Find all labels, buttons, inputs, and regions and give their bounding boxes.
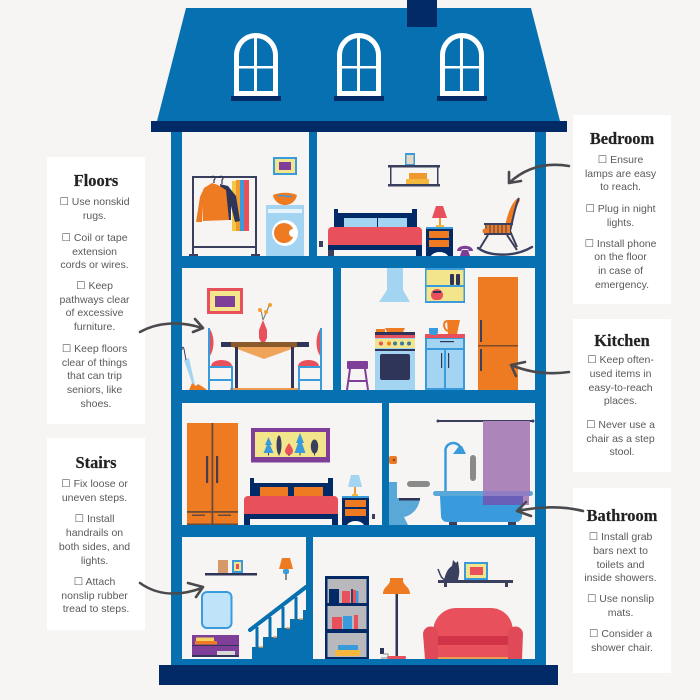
panel: bedroom [573, 115, 671, 304]
checklist: floors: furniture. [74, 321, 115, 333]
panel: kitchen [573, 319, 671, 472]
rocking chair [478, 198, 532, 255]
range hood [379, 268, 410, 302]
checklist: bedroom: in case of [598, 265, 643, 277]
window right [437, 33, 487, 101]
checklist: bedroom: on the floor [594, 251, 647, 263]
clothes rack [189, 176, 260, 255]
roof [157, 8, 560, 121]
window middle [334, 33, 384, 101]
room: dining [182, 288, 321, 390]
sofa [423, 608, 523, 659]
checklist: floors: rugs. [83, 210, 106, 222]
room: bathroom [389, 420, 534, 525]
checklist: stairs: lights. [81, 555, 108, 567]
checklist: stairs: ☐ Fix loose or [61, 478, 128, 490]
checklist: stairs: tread to steps. [63, 603, 129, 615]
staircase [250, 587, 306, 659]
checklist: stairs: uneven steps. [62, 492, 127, 504]
checklist: floors: that can trip [67, 370, 122, 382]
checklist: kitchen: places. [604, 395, 637, 407]
checklist: bedroom: lamps are easy [585, 168, 657, 180]
heading: stairs: Stairs [76, 453, 116, 472]
bed [244, 478, 338, 525]
nightstand with lamp [342, 475, 369, 525]
stove [375, 328, 415, 390]
room: master bedroom [187, 423, 375, 525]
checklist: stairs: ☐ Attach [74, 576, 115, 588]
checklist: bathroom: shower chair. [591, 642, 653, 654]
checklist: stairs: handrails on [66, 527, 123, 539]
dresser [192, 635, 239, 657]
wall shelf [205, 560, 257, 576]
checklist: bathroom: inside showers. [584, 572, 657, 584]
chair left [209, 328, 232, 390]
room: kitchen [347, 268, 518, 390]
kettle and cup [429, 320, 460, 335]
mirror [202, 592, 232, 628]
panel: stairs [47, 438, 145, 630]
eave [151, 121, 567, 132]
arrow: stairs to stair hall [140, 583, 203, 597]
telephone [457, 246, 473, 256]
floor lamp [383, 578, 410, 659]
checklist: floors: shoes. [81, 398, 111, 410]
checklist: floors: ☐ Use nonskid [59, 196, 130, 208]
walls and floors [171, 130, 546, 666]
heading: bedroom: Bedroom [590, 129, 655, 148]
panel: bathroom [573, 488, 671, 673]
room: living room [325, 560, 523, 659]
room: laundry closet [189, 157, 304, 256]
checklist: stairs: both sides, and [59, 541, 130, 553]
toilet paper [389, 456, 397, 464]
stool [347, 361, 368, 390]
checklist: kitchen: used items in [590, 368, 652, 380]
checklist: bedroom: ☐ Ensure [598, 154, 643, 166]
checklist: bathroom: mats. [608, 607, 633, 619]
refrigerator [478, 277, 518, 390]
charger [380, 648, 388, 658]
checklist: kitchen: easy-to-reach [588, 382, 653, 394]
checklist: kitchen: stool. [609, 446, 635, 458]
bed [328, 209, 422, 256]
checklist: bedroom: ☐ Install phone [585, 238, 657, 250]
checklist: kitchen: ☐ Never use a [586, 419, 655, 431]
checklist: bathroom: ☐ Consider a [589, 628, 652, 640]
checklist: bedroom: lights. [607, 217, 634, 229]
checklist: bathroom: toilets and [597, 559, 645, 571]
curtain rail [436, 420, 534, 422]
checklist: floors: ☐ Keep floors [62, 343, 127, 355]
wall outlet [319, 241, 323, 247]
upper cabinet [425, 268, 465, 303]
heading: bathroom: Bathroom [587, 506, 658, 525]
checklist: bedroom: ☐ Plug in night [585, 203, 656, 215]
flower vase [258, 303, 272, 342]
checklist: floors: ☐ Coil or tape [62, 232, 128, 244]
heading: kitchen: Kitchen [594, 331, 650, 350]
picture [273, 157, 297, 175]
foundation [159, 665, 558, 685]
tree picture [251, 428, 330, 462]
chair right [298, 328, 321, 390]
checklist: kitchen: chair as a step [586, 433, 655, 445]
toilet [389, 482, 420, 525]
room: stair hall [192, 558, 306, 659]
house structure [151, 0, 567, 685]
checklist: floors: pathways clear [60, 294, 130, 306]
nightstand with lamp [426, 206, 453, 256]
heading: floors: Floors [74, 171, 118, 190]
checklist: floors: cords or wires. [60, 259, 129, 271]
wall shelf [388, 153, 440, 186]
umbrella and shoes [182, 347, 207, 390]
washing machine [266, 205, 304, 256]
arrow: floors to dining room [140, 319, 203, 332]
checklist: floors: extension [72, 246, 117, 258]
window left [231, 33, 281, 101]
chimney [407, 0, 437, 27]
checklist: bathroom: ☐ Install grab [589, 531, 653, 543]
cat shelf [438, 560, 513, 587]
checklist: bathroom: bars next to [593, 545, 648, 557]
wall lamp [279, 558, 293, 580]
checklist: stairs: nonslip rubber [61, 590, 128, 602]
checklist: bathroom: ☐ Use nonslip [587, 593, 654, 605]
checklist: floors: seniors, like [67, 384, 122, 396]
shower curtain [483, 421, 530, 505]
wall plug [372, 514, 375, 519]
arrow: bathroom to bathtub [517, 502, 583, 516]
dining table [221, 342, 309, 390]
grab bars [407, 455, 476, 487]
checklist: stairs: ☐ Install [75, 513, 114, 525]
checklist: floors: of excessive [66, 307, 124, 319]
room: bedroom [319, 153, 532, 256]
bookcase [325, 576, 369, 659]
checklist: bedroom: to reach. [600, 181, 641, 193]
checklist: floors: ☐ Keep [76, 280, 113, 292]
arrow: bedroom to rocking chair [509, 165, 569, 183]
bathtub [433, 491, 533, 525]
picture [207, 288, 243, 314]
laundry basket [273, 193, 297, 205]
lower cabinet [425, 334, 465, 390]
shower [446, 443, 466, 491]
arrow: kitchen to refrigerator [511, 362, 569, 376]
panel: floors [47, 157, 145, 424]
wardrobe [187, 423, 238, 525]
checklist: bedroom: emergency. [595, 279, 649, 291]
checklist: floors: clear of things [62, 357, 127, 369]
checklist: kitchen: ☐ Keep often- [587, 354, 654, 366]
